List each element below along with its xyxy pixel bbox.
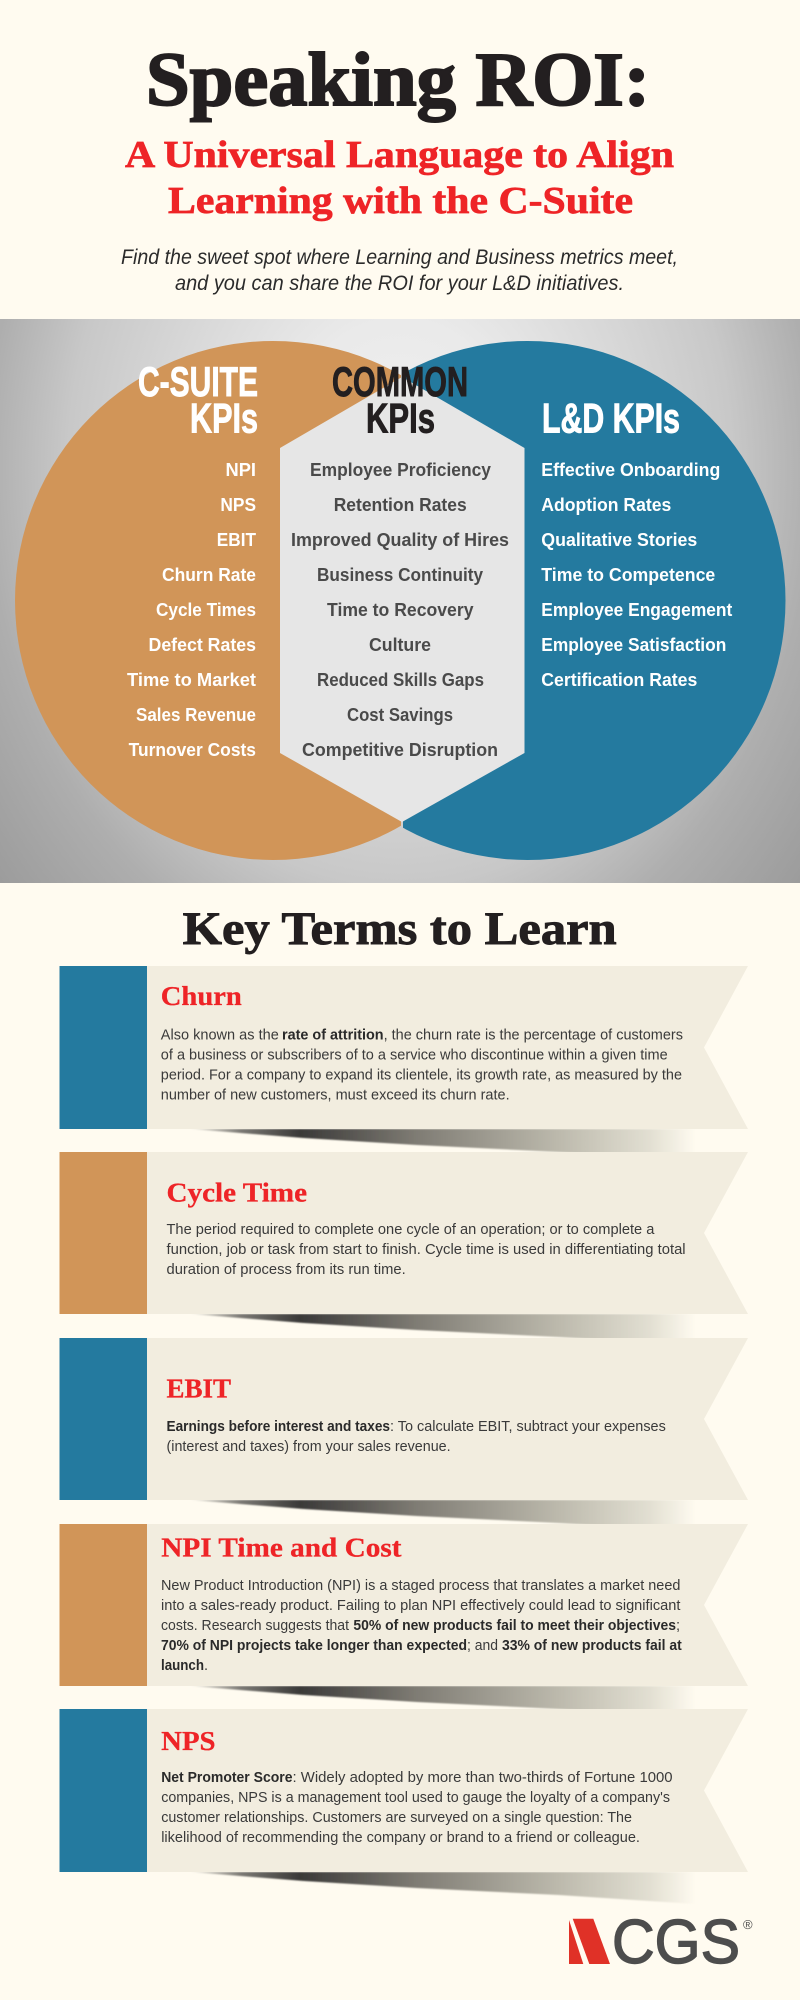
icon: red logo mark [569,1919,610,1964]
card body: costs. Research suggests that [161,1618,349,1634]
list: common KPIs: Retention Rates [334,495,467,515]
list: common KPIs: Improved Quality of Hires [291,530,509,550]
logo: CGS [569,1908,753,1977]
list: common KPIs: Time to Recovery [327,600,474,620]
list: L&D KPIs: Adoption Rates [541,495,671,515]
card body: 33% of new products fail at [502,1638,682,1654]
card: NPS [60,1709,748,1904]
card body: function, job or task from start to finish. Cycle time is used in differentiating total [166,1242,686,1258]
list: C-suite KPIs: Sales Revenue [136,705,256,725]
card body [161,1027,683,1103]
card body: period. For a company to expand its clientele, its growth rate, as measured by the [161,1067,682,1083]
column: L&D KPIs [541,394,732,690]
card body: customer relationships. Customers are surveyed on a single question: The [161,1810,632,1826]
list: L&D KPIs: Effective Onboarding [541,460,720,480]
heading: key terms: Key Terms to Learn [183,903,617,955]
card body [161,1770,673,1846]
card body: likelihood of recommending the company or brand to a friend or colleague. [161,1830,640,1846]
card title: Cycle Time [166,1178,307,1208]
title: Speaking ROI: [146,38,650,122]
list: common KPIs: Business Continuity [317,565,483,585]
card body [166,1222,686,1278]
card body: : Widely adopted by more than two-thirds of Fortune 1000 [292,1770,673,1786]
card title: NPI Time and Cost [161,1533,402,1563]
card body: 70% of NPI projects take longer than expected [161,1638,467,1654]
list: C-suite KPIs: NPI [226,460,256,480]
card body: duration of process from its run time. [166,1262,406,1278]
subtitle [125,134,674,222]
card title: NPS [161,1726,216,1756]
list: L&D KPIs: Time to Competence [541,565,715,585]
card body: number of new customers, must exceed its churn rate. [161,1087,510,1103]
list: C-suite KPIs: Churn Rate [162,565,256,585]
card body: , the churn rate is the percentage of customers [384,1027,683,1043]
list: L&D KPIs: Qualitative Stories [541,530,697,550]
list: common KPIs: Culture [369,635,431,655]
list: C-suite KPIs: Cycle Times [156,600,256,620]
circle: C-suite [15,341,401,860]
list: L&D KPIs: Employee Satisfaction [541,635,726,655]
card body: : To calculate EBIT, subtract your expenses [390,1419,666,1435]
column: common KPIs [291,358,509,760]
card body: 50% of new products fail to meet their objectives [353,1618,676,1634]
registered mark: ® [743,1917,753,1932]
list: common KPIs: Reduced Skills Gaps [317,670,484,690]
card body: . [204,1658,208,1674]
list: C-suite KPIs [127,460,256,760]
card body: Also known as the [161,1027,279,1043]
list: L&D KPIs: Employee Engagement [541,600,732,620]
card body [161,1578,682,1674]
heading: L&D KPIs: L&D KPIs [542,394,680,442]
heading: common KPIs: KPIs [366,394,435,442]
card body: rate of attrition [282,1027,384,1043]
card: EBIT [60,1338,748,1531]
heading: common KPIs [332,358,468,442]
list: C-suite KPIs: EBIT [217,530,256,550]
column: C-suite KPIs [127,358,258,760]
list: common KPIs: Cost Savings [347,705,453,725]
card body: launch [161,1658,204,1674]
card body: ; [676,1618,680,1634]
list: C-suite KPIs: Defect Rates [148,635,256,655]
card body: (interest and taxes) from your sales revenue. [166,1439,451,1455]
intro text: and you can share the ROI for your L&D initiatives. [175,272,624,295]
card body: companies, NPS is a management tool used to gauge the loyalty of a company's [161,1790,670,1806]
list: common KPIs: Employee Proficiency [310,460,491,480]
intro text: Find the sweet spot where Learning and Business metrics meet, [121,246,678,269]
card body [166,1419,666,1455]
list: C-suite KPIs: Time to Market [127,670,256,690]
card body: New Product Introduction (NPI) is a staged process that translates a market need [161,1578,680,1594]
card body: of a business or subscribers of to a service who discontinue within a given time [161,1047,668,1063]
card body: Earnings before interest and taxes [166,1419,390,1435]
card: NPI time and cost [60,1524,748,1717]
heading: C-suite KPIs [138,358,258,442]
card body: ; and [467,1638,498,1654]
list: C-suite KPIs: NPS [220,495,256,515]
list: L&D KPIs [541,460,732,690]
intro text [121,246,678,295]
heading: C-suite KPIs: KPIs [190,394,258,442]
subtitle: A Universal Language to Align [125,134,674,176]
overlap: common hexagon [280,377,524,822]
card body: The period required to complete one cycle of an operation; or to complete a [166,1222,655,1238]
list: common KPIs: Competitive Disruption [302,740,498,760]
card body: Net Promoter Score [161,1770,292,1786]
card title: EBIT [166,1374,231,1404]
circle: L&D [403,341,786,860]
heading: common KPIs: COMMON [332,358,468,405]
card: cycle time [60,1152,748,1345]
logo wordmark: CGS [612,1908,740,1977]
panel: venn diagram [0,319,800,883]
list: C-suite KPIs: Turnover Costs [129,740,256,760]
heading: C-suite KPIs: C-SUITE [138,358,258,405]
list: common KPIs [291,460,509,760]
list: L&D KPIs: Certification Rates [541,670,697,690]
card title: Churn [161,981,242,1011]
card: churn [60,966,748,1160]
card body: into a sales-ready product. Failing to plan NPI effectively could lead to significant [161,1598,680,1614]
subtitle: Learning with the C-Suite [168,180,633,222]
